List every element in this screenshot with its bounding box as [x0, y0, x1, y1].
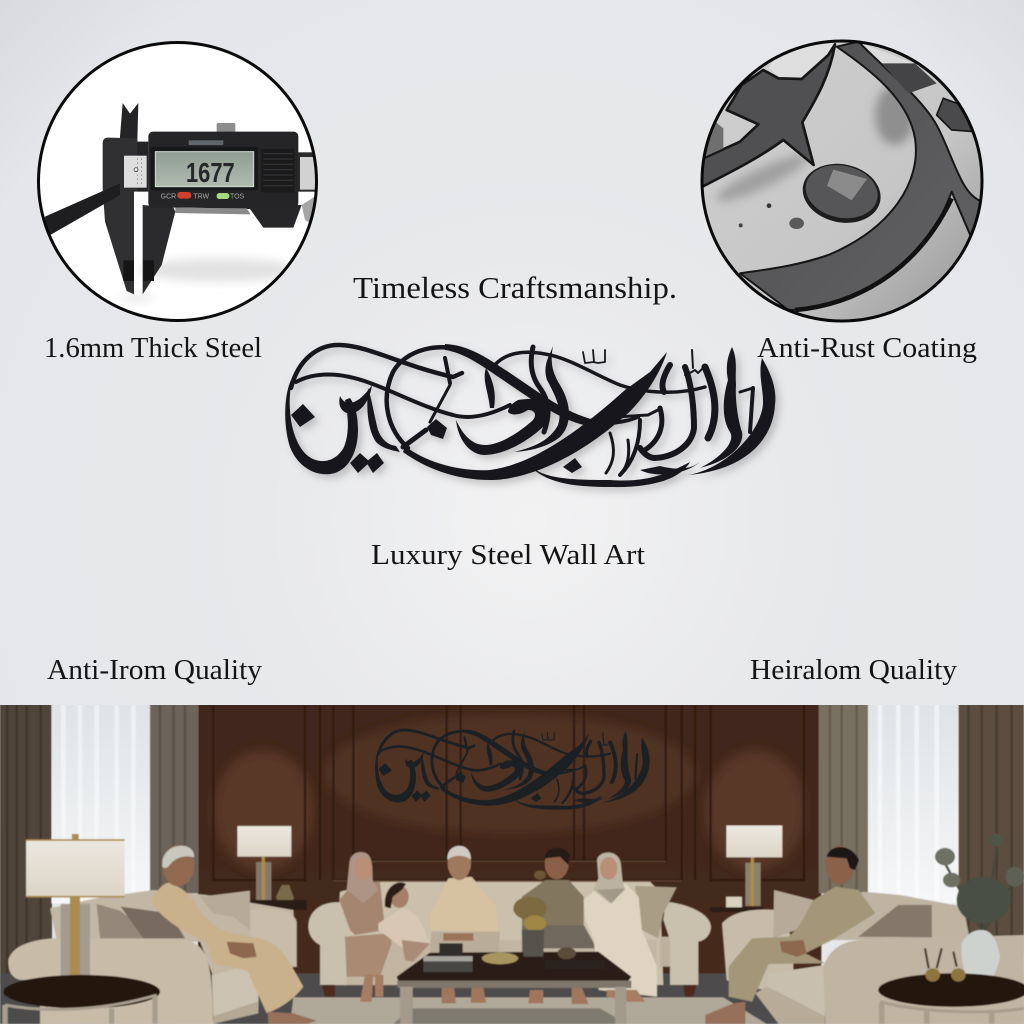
flowers on table — [513, 870, 547, 957]
label: coating: Anti-Rust Coating — [757, 332, 977, 364]
label: left quality: Anti-Irom Quality — [47, 654, 263, 686]
wall: wood panelling — [198, 700, 821, 983]
caliper labels: TRW — [193, 193, 210, 200]
circle: anti-rust coating close-up — [695, 35, 990, 330]
room photo: family living room — [0, 700, 1024, 1024]
circle: caliper close-up — [38, 42, 317, 320]
caliper labels — [161, 194, 244, 198]
label: right quality: Heiralom Quality — [750, 654, 957, 686]
plant and vase — [935, 833, 1024, 988]
right sofa — [722, 890, 1024, 1024]
person: child — [378, 882, 431, 962]
person: young man centre — [522, 848, 597, 1004]
caliper labels: GCR — [161, 193, 176, 200]
person: older man centre — [430, 846, 500, 1003]
heading: timeless craftsmanship: Timeless Craftsmanship. — [353, 270, 677, 305]
person: left man — [152, 845, 317, 1024]
front table right — [878, 948, 1024, 1024]
label: thickness: 1.6mm Thick Steel — [44, 332, 262, 364]
back lamp left — [237, 826, 307, 910]
centre sofa — [308, 882, 711, 997]
right curtains and window — [819, 700, 1024, 953]
front table left — [3, 975, 160, 1024]
floor and rug — [0, 973, 1024, 1024]
calligraphy wall art — [285, 344, 775, 487]
person: woman right — [584, 852, 657, 1002]
caliper readout: 1677 — [186, 157, 235, 188]
left curtains and window — [0, 700, 199, 983]
left sofa — [8, 890, 297, 1024]
back lamp right — [710, 825, 782, 912]
person: woman left — [339, 852, 392, 1002]
label: product: Luxury Steel Wall Art — [371, 539, 645, 571]
caliper labels: TOS — [230, 193, 245, 200]
coffee table — [397, 943, 631, 1024]
person: right man — [705, 846, 875, 1024]
front lamp left — [26, 834, 125, 988]
calligraphy on wall — [375, 729, 650, 810]
